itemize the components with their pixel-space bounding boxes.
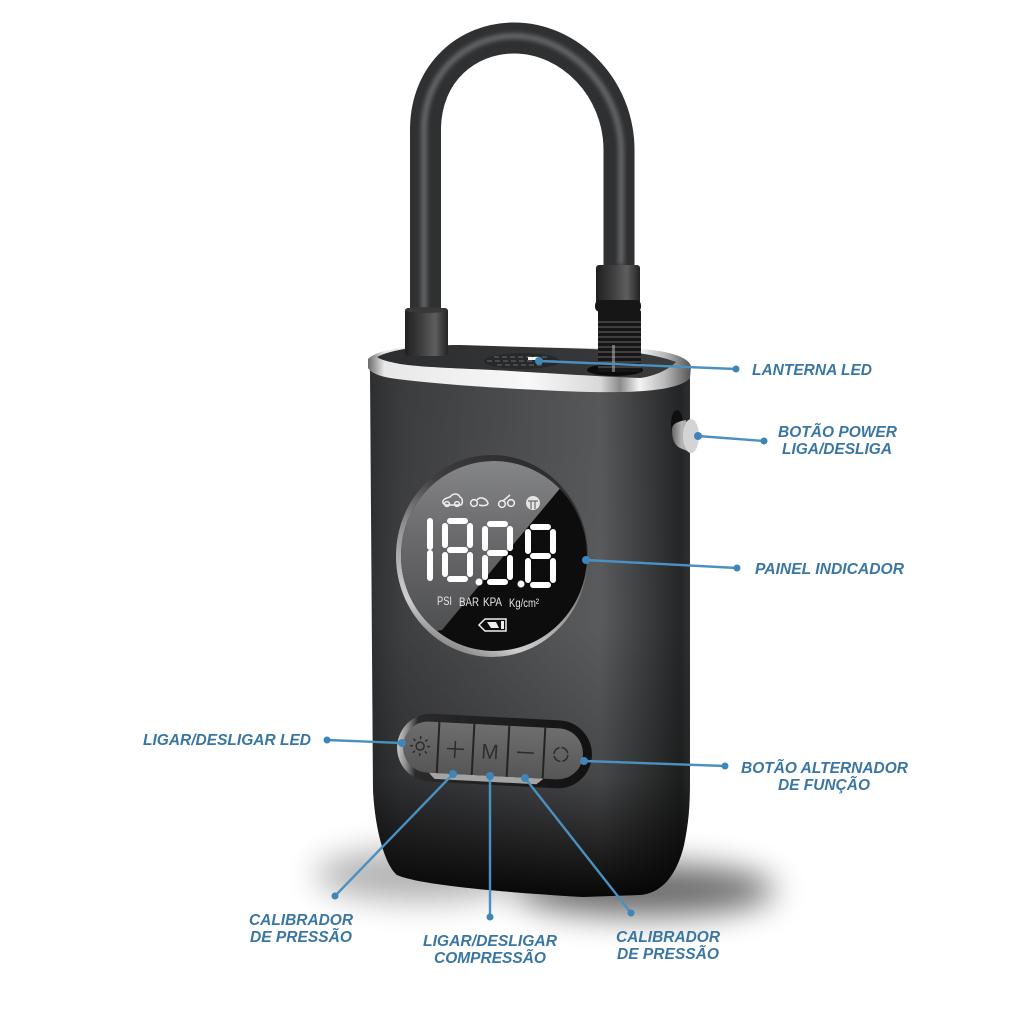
callout: BOTÃO POWER: BOTÃO POWER bbox=[778, 421, 897, 441]
callout: PAINEL INDICADOR bbox=[582, 556, 904, 578]
top face and chrome band bbox=[368, 345, 691, 392]
callout: LANTERNA LED bbox=[535, 357, 872, 379]
callout: LIGAR/DESLIGAR COMPRESSÃO bbox=[423, 772, 557, 967]
button pill bbox=[395, 712, 594, 790]
display bbox=[396, 455, 588, 657]
callout: CALIBRADOR left: CALIBRADOR bbox=[249, 912, 353, 929]
callout: BOTÃO ALTERNADOR: BOTÃO ALTERNADOR bbox=[741, 757, 908, 777]
button: LED bbox=[410, 736, 431, 757]
floor shadow bbox=[315, 849, 775, 916]
button: M: M bbox=[481, 740, 499, 764]
callout: CALIBRADOR right: DE PRESSÃO bbox=[617, 943, 720, 963]
unit labels bbox=[437, 594, 539, 610]
digit 8 second bbox=[485, 524, 510, 582]
button: mode bbox=[554, 747, 568, 762]
callout: PAINEL INDICADOR: PAINEL INDICADOR bbox=[755, 561, 904, 578]
digit 8 first bbox=[445, 521, 470, 579]
digit 8 third bbox=[528, 527, 553, 585]
button: plus bbox=[447, 741, 464, 758]
right threaded connector bbox=[587, 265, 643, 376]
callout: LIGAR/DESLIGAR LED bbox=[143, 732, 406, 749]
callout: BOTÃO POWER: LIGA/DESLIGA bbox=[782, 441, 892, 458]
unit labels: PSI bbox=[437, 594, 452, 608]
callout: BOTÃO ALTERNADOR: DE FUNÇÃO bbox=[778, 774, 871, 794]
callout: LIGAR/DESLIGAR COMPRESSÃO: LIGAR/DESLIGAR bbox=[423, 933, 557, 950]
callout: CALIBRADOR right: CALIBRADOR bbox=[616, 929, 720, 946]
callout: BOTÃO POWER bbox=[694, 421, 897, 458]
callout: LANTERNA LED: LANTERNA LED bbox=[752, 362, 872, 379]
main body bbox=[370, 354, 690, 897]
button: minus bbox=[517, 751, 534, 754]
battery icon bbox=[479, 619, 506, 631]
unit labels: Kg/cm² bbox=[509, 596, 539, 610]
callout: LIGAR/DESLIGAR COMPRESSÃO: COMPRESSÃO bbox=[434, 947, 547, 967]
callout: LIGAR/DESLIGAR LED: LIGAR/DESLIGAR LED bbox=[143, 732, 311, 749]
display glossy highlight bbox=[401, 461, 560, 631]
left ferrule bbox=[405, 307, 448, 356]
callout: CALIBRADOR left: DE PRESSÃO bbox=[250, 926, 353, 946]
unit labels: KPA bbox=[483, 595, 502, 609]
shackle hose bbox=[424, 36, 621, 320]
digit 1 bbox=[427, 521, 433, 578]
vehicle mode icons bbox=[443, 494, 540, 510]
decimal dots bbox=[476, 578, 524, 588]
seven-segment readout 18.8.8 bbox=[430, 521, 553, 588]
LED lantern grille bbox=[484, 353, 560, 369]
side power button bbox=[671, 410, 699, 453]
callout: CALIBRADOR right bbox=[521, 774, 720, 963]
callout: CALIBRADOR left bbox=[249, 770, 457, 946]
unit labels: BAR bbox=[459, 595, 479, 609]
callout: BOTÃO ALTERNADOR bbox=[580, 757, 908, 794]
